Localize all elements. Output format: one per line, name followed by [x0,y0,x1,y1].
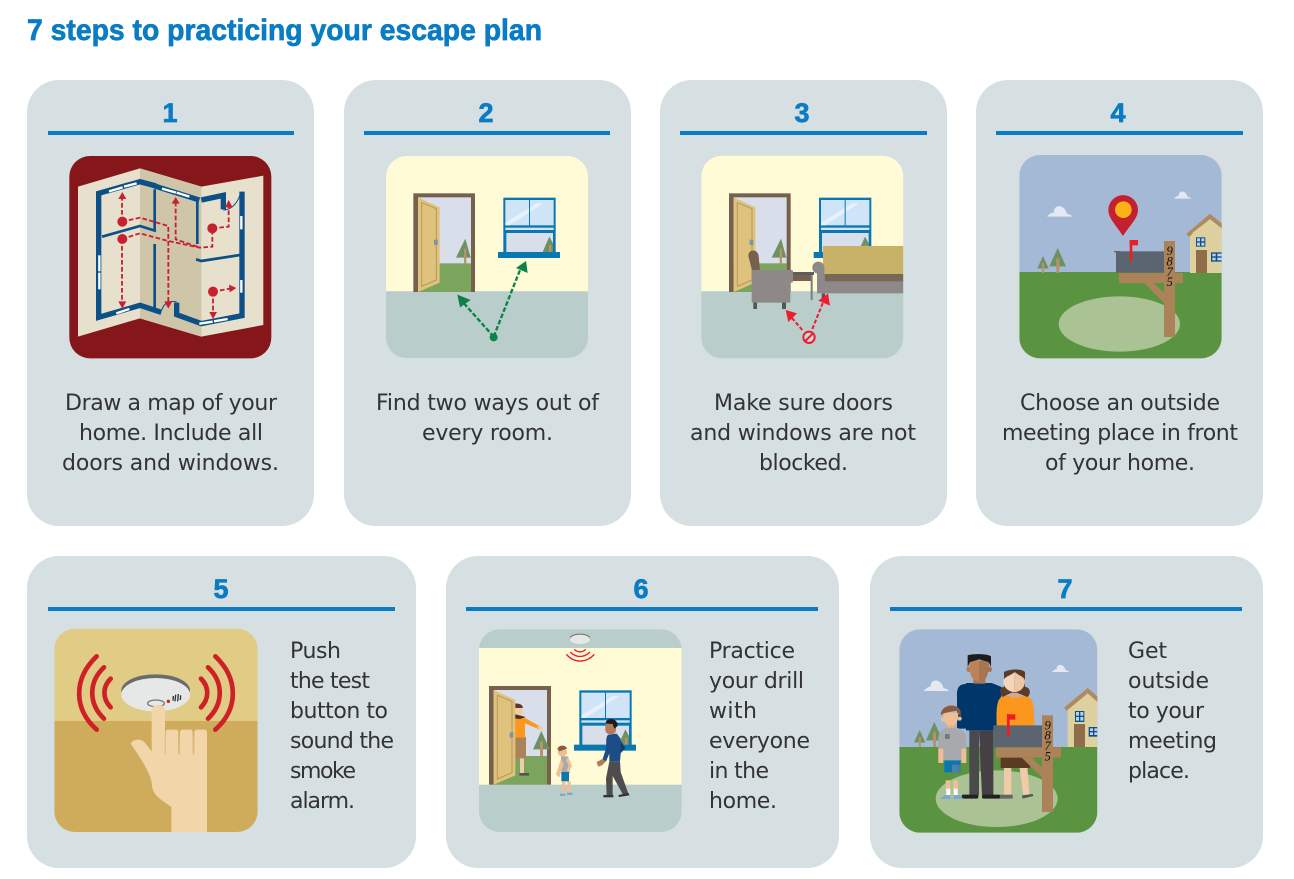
step 3 number: 3 [794,98,810,128]
step 1 number: 1 [162,98,178,128]
step 2 text: every room. [422,421,553,446]
step 4 number: 4 [1110,98,1126,128]
step 5 text: sound the [290,729,394,754]
step 1 text: doors and windows. [62,451,279,476]
step 6 text: your drill [709,669,804,694]
map pin [1108,195,1138,236]
step 7 text: place. [1128,759,1190,784]
title: 7 steps to practicing your escape plan [27,14,542,47]
step 5 text [290,639,394,814]
step 3 text: Make sure doors [714,391,893,416]
step 6 text: Practice [709,639,795,664]
step 5 text: alarm. [290,789,355,814]
panel: step 3 [660,80,947,526]
icon: room with door and window exits [386,156,588,358]
step 1 text: home. Include all [79,421,263,446]
panel: step 1 [27,80,314,526]
woman in doorway [514,703,543,776]
doorway [489,686,551,785]
step 6 text: home. [709,789,777,814]
step 4 text [1002,391,1238,476]
mailbox [993,714,1061,812]
step 5 text: smoke [290,759,356,784]
mailbox: 5 [1167,275,1173,289]
panel: step 7 [870,556,1263,868]
house [1065,691,1100,747]
step 2 text [376,391,600,446]
mailbox [1114,240,1183,337]
step 4 text: meeting place in front [1002,421,1238,446]
mailbox: 7 [1167,265,1174,279]
panel: step 5 [27,556,416,868]
step 5 text: the test [290,669,370,694]
step 7 text: meeting [1128,729,1217,754]
boy [938,706,966,799]
mailbox: 8 [1167,255,1174,269]
man [597,719,629,797]
panel: step 2 [344,80,631,526]
mailbox: 8 [1045,729,1052,743]
icon: family practicing drill [479,629,682,832]
icon: outside meeting place with mailbox [1019,155,1223,359]
step 6 text [709,639,810,814]
icon: blocked door and window [701,156,903,358]
step 7 text: to your [1128,699,1205,724]
step 1 text: Draw a map of your [65,391,278,416]
step 3 text: blocked. [759,451,848,476]
icon: finger pushing smoke alarm test button [54,629,258,832]
mailbox: 9 [1167,244,1174,258]
open door [494,690,515,785]
step 5 text: button to [290,699,388,724]
panel: step 6 [446,556,839,868]
step 7 text [1128,639,1217,784]
ceiling smoke alarm [566,634,594,661]
step 6 number: 6 [633,574,649,604]
side table [793,272,814,300]
mailbox: 7 [1045,739,1052,753]
man [957,654,1002,799]
step 1 text [62,391,279,476]
step 7 text: Get [1128,639,1167,664]
step 6 text: in the [709,759,769,784]
step 6 text: with [709,699,757,724]
sofa [812,246,903,301]
step 3 text [690,391,916,476]
step 4 text: Choose an outside [1020,391,1220,416]
step 2 number: 2 [478,98,494,128]
step 6 text: everyone [709,729,810,754]
boy [556,746,572,796]
step 3 text: and windows are not [690,421,916,446]
step 5 number: 5 [213,574,229,604]
step 2 text: Find two ways out of [376,391,600,416]
step 4 text: of your home. [1045,451,1195,476]
step 7 text: outside [1128,669,1209,694]
icon: family at the meeting place [899,629,1100,833]
armchair [748,250,793,309]
panel: step 4 [976,80,1263,526]
step 5 text: Push [290,639,341,664]
mailbox: 9 [1045,719,1052,733]
house [1188,216,1223,273]
icon: floor plan map [69,156,271,358]
mailbox: 5 [1045,749,1051,763]
step 7 number: 7 [1057,574,1073,604]
woman [997,669,1034,799]
